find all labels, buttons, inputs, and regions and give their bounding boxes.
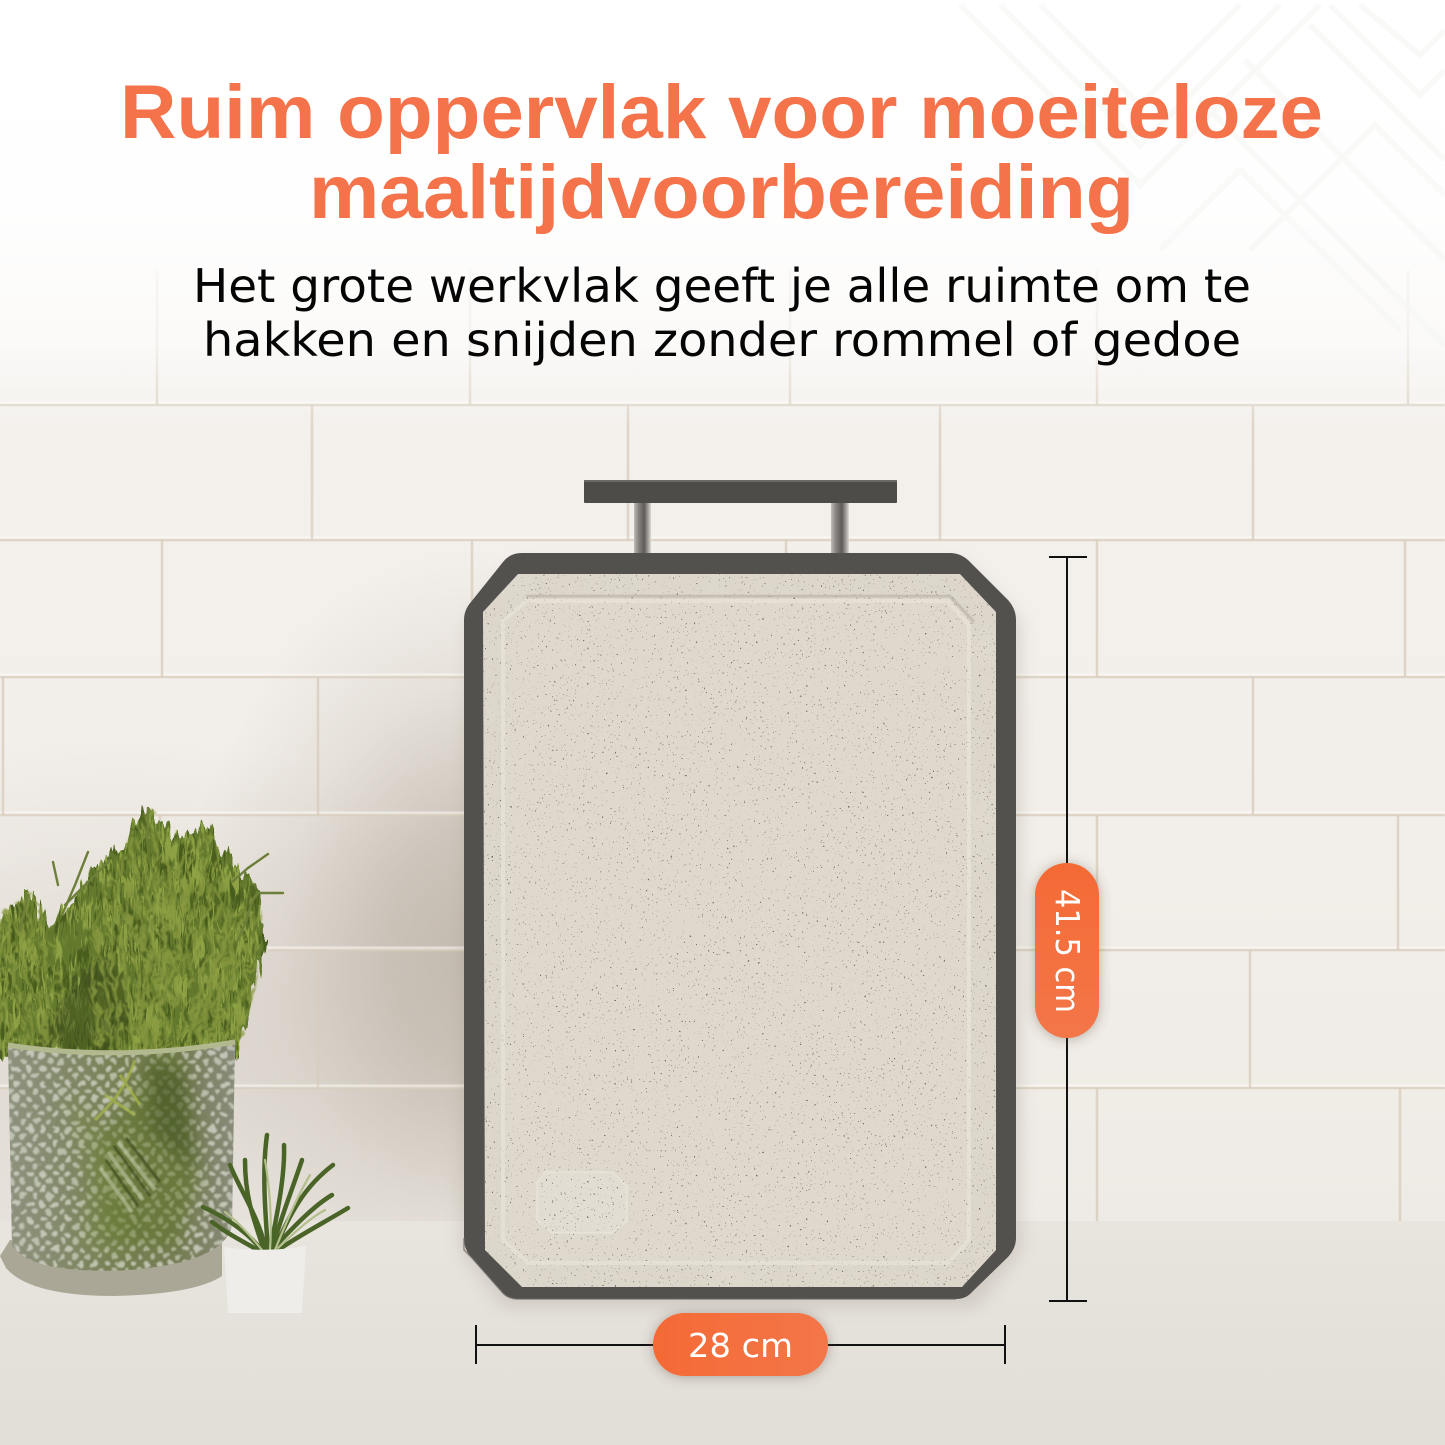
height pill <box>1035 863 1099 1038</box>
juice groove <box>503 596 974 1263</box>
spiky foliage mass <box>0 800 285 1060</box>
vase base <box>0 1240 222 1296</box>
height pill: 41.5 cm <box>1048 889 1087 1013</box>
glass vase <box>5 1040 240 1280</box>
title: Ruim oppervlak voor moeiteloze <box>120 70 1323 155</box>
subtitle: Het grote werkvlak geeft je alle ruimte om te <box>193 259 1251 313</box>
small potted plant <box>203 1135 348 1313</box>
height dimension line <box>1035 557 1099 1301</box>
faint chevron pattern <box>960 5 1445 345</box>
handle <box>584 480 897 554</box>
cutting board <box>462 480 1020 1306</box>
frond tips <box>20 808 283 940</box>
succulent leaves <box>203 1135 348 1250</box>
top white fade <box>0 0 1445 430</box>
feathered fronds <box>0 808 260 1050</box>
plant foliage <box>0 800 285 1060</box>
title <box>120 70 1323 235</box>
inner field <box>505 599 970 1262</box>
width dimension line <box>476 1313 1005 1376</box>
dark board frame <box>464 553 1016 1299</box>
width pill <box>653 1313 828 1376</box>
board wall shadow <box>462 565 1020 1306</box>
submerged stems <box>100 1052 200 1250</box>
width pill: 28 cm <box>688 1326 793 1365</box>
large plant in glass vase <box>0 800 285 1296</box>
subtitle: hakken en snijden zonder rommel of gedoe <box>203 313 1241 367</box>
grip texture patch <box>537 1172 627 1233</box>
speckled cutting surface <box>480 570 1000 1290</box>
title: maaltijdvoorbereiding <box>309 150 1134 235</box>
subtitle <box>193 259 1251 367</box>
counter top <box>0 1221 1445 1445</box>
white pot <box>224 1246 306 1313</box>
